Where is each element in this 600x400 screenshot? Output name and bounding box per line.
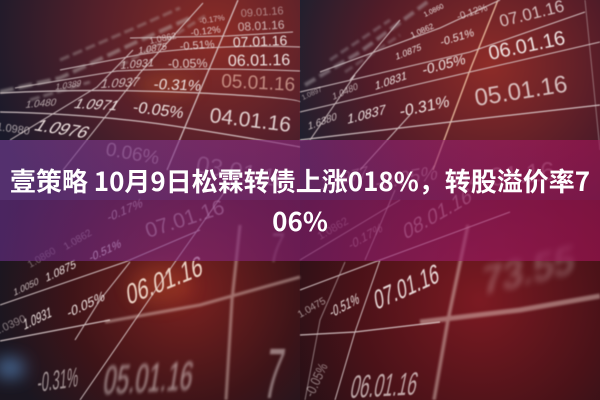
grid lines: lower left table <box>0 170 240 400</box>
table numbers: top right: -0.51% <box>440 27 475 49</box>
table numbers: lower left: 03.01.16 <box>194 151 291 194</box>
table numbers: top left: -0.12% <box>190 24 222 39</box>
table numbers: lower right: 1.0977 <box>320 162 369 194</box>
purple title band <box>0 140 600 261</box>
table numbers: lower right: -0.05% <box>302 361 331 399</box>
table numbers: top left: 04.01.16 <box>208 104 292 137</box>
table numbers: lower left: -0.17% <box>107 195 143 225</box>
table numbers: lower right: 04.01.16 <box>452 156 556 196</box>
soft text streaks: top right <box>305 0 430 85</box>
table numbers: top left: -0.05% <box>168 56 208 71</box>
table numbers: top right: -0.05% <box>422 50 467 78</box>
large blurred digit 7 <box>260 225 289 400</box>
title line 2: 06% <box>272 202 328 239</box>
table numbers: lower left: 06.01.16 <box>125 250 204 312</box>
title line 1: 壹策略 10月9日松霖转债上涨018%，转股溢价率7 <box>10 162 590 199</box>
table numbers: top left: 05.01.16 <box>221 71 296 96</box>
table numbers: top right: 1.0480 <box>332 81 358 102</box>
table numbers: lower right: 1.0862 <box>316 215 351 243</box>
large blurred digit 7: 7 <box>267 225 286 272</box>
table numbers: lower left: 07.01.16 <box>142 196 227 243</box>
blue lens glare <box>0 360 24 376</box>
table numbers: lower left: 1.0931 <box>23 304 52 333</box>
table numbers: top right: 1.0860 <box>423 3 445 19</box>
table numbers: top right: -0.12% <box>456 3 489 23</box>
blurred foreground lines: lower left <box>105 225 300 400</box>
table numbers: lower left: -0.51% <box>89 238 122 265</box>
table numbers: top left: 1.0931 <box>119 57 155 72</box>
table numbers: lower left: -0.05% <box>67 288 105 321</box>
table numbers: top right: 1.0875 <box>395 42 422 62</box>
table numbers: lower right: -0.05% <box>375 162 439 195</box>
table numbers: top left: 06.01.16 <box>228 52 290 70</box>
table numbers: top left: 1.0389 <box>55 78 82 92</box>
table numbers: top right: -0.31% <box>400 92 450 121</box>
table numbers: top left: -0.17% <box>199 13 225 26</box>
blurred foreground lines: lower right <box>420 225 600 400</box>
table numbers: lower right: 08.01.16 <box>402 183 473 245</box>
table numbers: lower left: -0.31% <box>37 361 79 398</box>
table numbers: top left: 1.0480 <box>24 97 58 111</box>
table numbers: top left: 1.0862 <box>148 30 177 46</box>
table numbers: lower right <box>296 156 575 400</box>
grid lines: top right table <box>300 0 600 170</box>
table numbers: top left: 09.01.16 <box>240 5 284 20</box>
table numbers: lower right: 1.0475 <box>296 296 328 321</box>
table numbers: lower right: -0.51% <box>329 289 360 321</box>
table numbers: lower right: -0.17% <box>348 220 383 253</box>
table numbers: lower left: 1.0862 <box>62 228 94 253</box>
table numbers: lower right: 73.55 <box>482 237 575 304</box>
table numbers: top left: -0.05% <box>131 98 186 122</box>
table numbers: lower left: 1.0875 <box>45 258 77 285</box>
table numbers: top right: 1.6380 <box>308 111 337 133</box>
table numbers: top right: 1.0837 <box>347 101 386 127</box>
table numbers: lower left: 0.06% <box>104 139 161 169</box>
table numbers: lower left <box>0 139 291 400</box>
table numbers: top right: 1.0862 <box>409 21 436 40</box>
table numbers: top right: 06.01.16 <box>486 27 567 65</box>
table numbers: top left: 1.0875 <box>138 41 168 57</box>
table numbers: top left: -0.31% <box>152 76 203 95</box>
table numbers: top left: 07.01.16 <box>233 32 288 50</box>
table numbers: top left <box>0 5 296 142</box>
table numbers: top right: 05.01.16 <box>473 71 569 112</box>
table numbers: lower left: 1.0860 <box>26 246 58 271</box>
table numbers: top left: 1.0976 <box>31 116 94 142</box>
title band lighter upper strip <box>0 140 600 200</box>
soft text streaks: top left <box>0 8 205 100</box>
background left half <box>0 0 300 400</box>
table numbers: top left: -0.51% <box>179 39 215 53</box>
table numbers: top right <box>301 0 569 133</box>
table numbers: top left: 1.0971 <box>71 97 122 114</box>
table numbers: top right: 1.0897 <box>301 86 323 102</box>
background right half <box>300 0 600 400</box>
table numbers: top left: 08.01.16 <box>237 18 285 34</box>
grid lines: lower right table <box>300 190 510 400</box>
table numbers: top right: 1.0831 <box>375 70 407 93</box>
grid lines: top left table <box>0 0 300 170</box>
table numbers: top left: 1.0937 <box>99 74 142 91</box>
table numbers: lower left: 1.0050 <box>13 276 39 298</box>
table numbers: lower right: 07.01.16 <box>372 257 441 316</box>
